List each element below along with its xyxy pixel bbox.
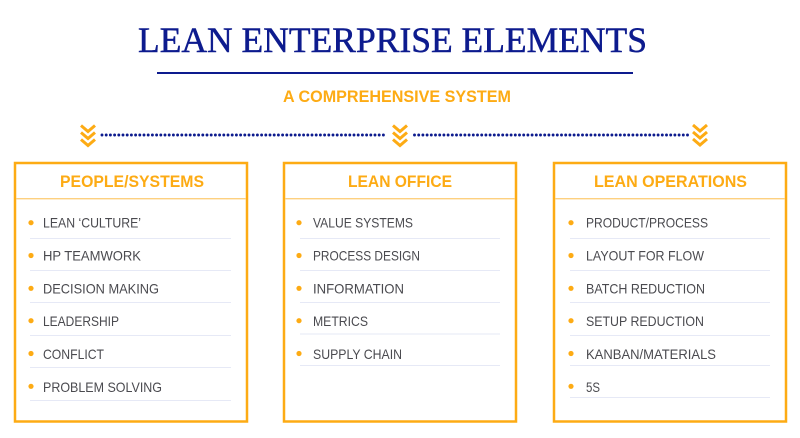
title underline [157,72,633,74]
list items: LAYOUT FOR FLOW [586,247,705,263]
list items: LEADERSHIP [43,313,119,329]
panel header rule [555,198,785,199]
list items: VALUE SYSTEMS [313,215,413,231]
list items: METRICS [313,313,368,329]
list items: INFORMATION [313,280,404,296]
connector: dotted arrows [81,125,707,146]
list items: SETUP REDUCTION [586,313,704,329]
subtitle: A COMPREHENSIVE SYSTEM [283,87,511,106]
panel: lean office [284,163,516,422]
panel frame [554,163,786,422]
list items: PROCESS DESIGN [313,247,420,263]
heading: LEAN OPERATIONS [594,172,747,191]
icon: centre chevrons [393,126,407,146]
list items [568,215,770,398]
panel: lean operations [554,163,786,422]
panel header rule [285,198,515,199]
panel frame [15,163,247,422]
list items: HP TEAMWORK [43,247,142,263]
heading: LEAN OFFICE [348,172,452,191]
dotted line: right [414,134,691,136]
heading: PEOPLE/SYSTEMS [60,172,204,191]
panel frame [284,163,516,422]
panel: people/systems [15,163,247,422]
list items: 5S [586,379,600,395]
list items: CONFLICT [43,346,104,362]
title: LEAN ENTERPRISE ELEMENTS [138,20,647,60]
list items: KANBAN/MATERIALS [586,346,716,362]
list items [296,215,500,366]
list items: PRODUCT/PROCESS [586,215,708,231]
panel header rule [16,198,246,199]
list items [28,215,231,401]
dotted line: left [102,134,387,136]
icon: left chevrons [81,126,95,146]
list items: DECISION MAKING [43,280,159,296]
list items: BATCH REDUCTION [586,280,705,296]
icon: right chevrons [693,125,707,145]
list items: SUPPLY CHAIN [313,346,402,362]
list items: LEAN ‘CULTURE’ [43,215,141,231]
list items: PROBLEM SOLVING [43,379,162,395]
